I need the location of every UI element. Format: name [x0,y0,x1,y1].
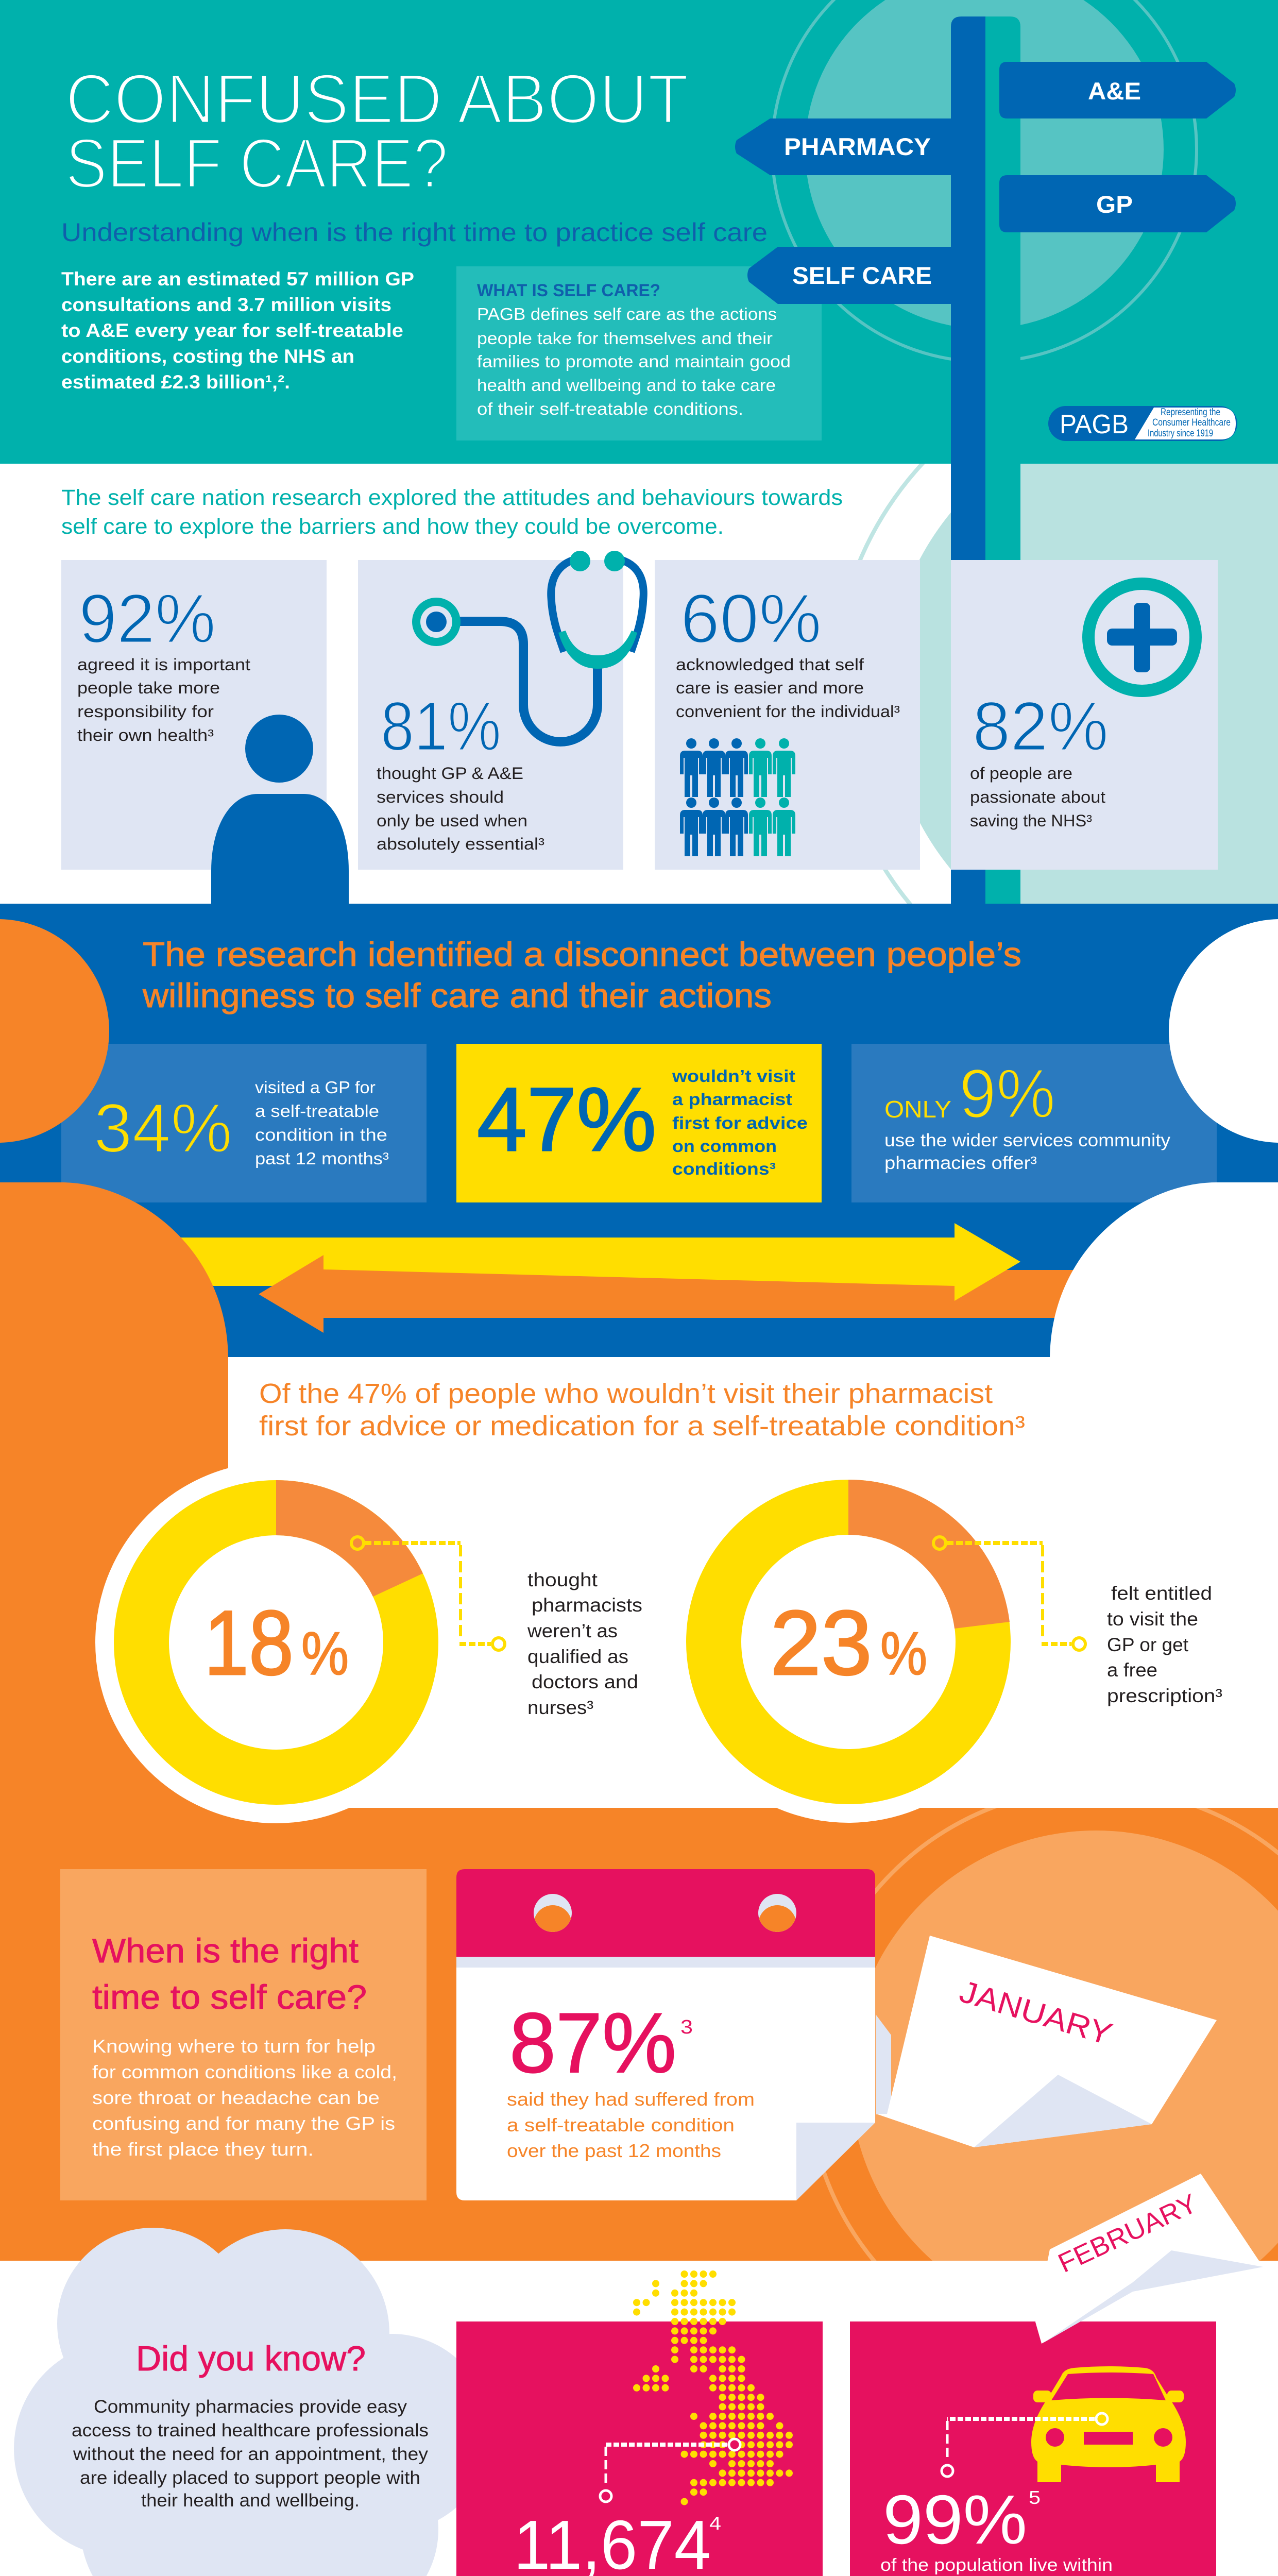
cloud: did you know: are ideally placed to support people with [80,2468,420,2488]
donut chart: 18 percent [95,1462,457,1823]
calendar page: February: FEBRUARY [1054,2189,1202,2279]
intro paragraph: There are an estimated 57 million GP [61,268,414,290]
23 percent caption: prescription³ [1107,1685,1222,1706]
panel: 34 percent [61,1044,427,1202]
panel: 34 percent: 34% [94,1089,232,1167]
panel: when is the right time: for common conditions like a cold, [92,2061,397,2082]
panel: only 9 percent: ONLY [884,1096,951,1123]
PAGB logo: Representing the [1161,407,1220,418]
sign: A&E: A&E [1088,77,1141,105]
panel: only 9 percent [851,1044,1217,1202]
cloud: did you know: access to trained healthcare professionals [72,2420,429,2441]
panel: 60 percent: acknowledged that self [676,655,864,674]
panel: 99 percent: of the population live within [880,2555,1113,2575]
panel: what is self care [456,266,822,440]
signpost pole [951,16,1020,904]
callout: map connector [600,2439,740,2502]
research intro heading: self care to explore the barriers and how they could be overcome. [61,514,724,539]
panel: 34 percent: past 12 months³ [255,1149,389,1168]
panel: 92 percent [61,560,327,870]
PAGB logo: Industry since 1919 [1148,428,1213,439]
panel: when is the right time: time to self care? [92,1978,367,2016]
panel: 11,674 pharmacies: 4 [709,2513,721,2534]
research intro heading [61,485,843,539]
callout: car connector [942,2413,1107,2477]
donut chart: 23 percent: 23 [770,1591,872,1694]
calendar page: January: JANUARY [956,1974,1116,2052]
18 percent caption: nurses³ [527,1697,593,1718]
panel: 99 percent [850,2321,1216,2576]
cloud: did you know: without the need for an appointment, they [73,2444,429,2464]
silhouettes: two people facing each other [0,919,1278,1391]
23 percent caption: a free [1107,1659,1157,1681]
panel: 60 percent: care is easier and more [676,679,864,697]
panel: what is self care: PAGB defines self care as the actions [477,304,777,324]
18 percent caption: thought [527,1569,598,1590]
icon: medical cross [1088,584,1196,691]
panel: when is the right time [60,1869,427,2200]
calendar page: February [1035,2174,1263,2344]
18 percent caption: pharmacists [532,1595,642,1616]
intro paragraph: conditions, costing the NHS an [61,346,354,367]
panel: 82 percent [951,560,1218,870]
title: CONFUSED ABOUT [65,60,689,139]
pharmacist heading [259,1378,1025,1442]
panel: 81 percent: services should [377,788,504,806]
sign: pharmacy [735,118,951,175]
icon: people pictogram [680,738,795,856]
panel: 92 percent: people take more [77,679,220,697]
icon: person [211,715,349,904]
pharmacist heading: Of the 47% of people who wouldn’t visit their pharmacist [259,1378,993,1409]
title [65,60,689,203]
18 percent caption: weren’t as [527,1620,618,1641]
23 percent caption: to visit the [1107,1608,1198,1630]
cloud: did you know: their health and wellbeing. [141,2490,360,2511]
panel: 47 percent: 47% [477,1070,656,1170]
23 percent caption: felt entitled [1111,1583,1212,1604]
cloud: did you know [14,2228,490,2576]
panel: 99 percent: 5 [1029,2487,1041,2508]
panel: 82 percent: saving the NHS³ [970,811,1092,830]
PAGB logo: PAGB [1060,410,1129,439]
sign: pharmacy: PHARMACY [784,133,931,160]
panel: 99 percent: 99% [883,2481,1027,2558]
panel: only 9 percent: 9% [959,1055,1055,1132]
sign: GP [999,175,1236,232]
panel: 47 percent: first for advice [672,1113,808,1132]
panel: 34 percent: a self-treatable [255,1101,379,1121]
panel: 47 percent: a pharmacist [672,1090,792,1109]
panel: 60 percent [655,560,920,870]
calendar page: January [876,1936,1217,2147]
panel: what is self care: of their self-treatable conditions. [477,399,743,418]
section 4 background circle [823,1808,1278,2261]
panel: when is the right time: the first place they turn. [92,2139,314,2160]
panel: 82 percent: 82% [973,687,1109,765]
panel: when is the right time: Knowing where to turn for help [92,2036,376,2057]
23 percent caption [1107,1583,1222,1706]
donut chart: 18 percent: % [301,1620,349,1688]
panel: 92 percent: their own health³ [77,726,214,744]
panel: 47 percent: wouldn’t visit [672,1066,795,1086]
research background circle [858,464,1278,904]
sign: A&E [999,62,1236,118]
intro paragraph: estimated £2.3 billion¹,². [61,371,290,393]
disconnect heading: The research identified a disconnect between people’s [143,935,1021,973]
panel: 82 percent: passionate about [970,788,1105,806]
23 percent caption: GP or get [1107,1634,1189,1655]
panel: 47 percent: conditions³ [672,1159,776,1178]
header background circle [772,0,1197,362]
panel: 47 percent [456,1044,822,1202]
panel: 60 percent: convenient for the individual³ [676,702,900,721]
PAGB logo [1048,406,1237,441]
calendar: 3 [680,2016,693,2038]
panel: when is the right time: confusing and for many the GP is [92,2113,395,2134]
panel: only 9 percent: pharmacies offer³ [884,1153,1037,1173]
cloud: did you know: Did you know? [136,2339,366,2378]
sign: self care [747,247,951,304]
panel: what is self care: people take for themselves and their [477,329,773,348]
panel: 34 percent: condition in the [255,1125,387,1144]
arrows: actions versus intentions [180,1223,1088,1333]
panel: 81 percent: absolutely essential³ [377,835,544,853]
callout: 18 percent connector [351,1537,505,1650]
calendar: over the past 12 months [507,2140,721,2161]
subtitle: Understanding when is the right time to practice self care [61,218,768,247]
disconnect heading [142,935,1021,1014]
panel: when is the right time: sore throat or headache can be [92,2087,380,2108]
sign: GP: GP [1096,191,1133,218]
donut chart: 18 percent: 18 [204,1591,294,1694]
panel: 81 percent [358,560,623,870]
disconnect heading: willingness to self care and their actions [142,976,772,1014]
donut chart: 23 percent [668,1461,1029,1823]
18 percent caption: qualified as [527,1646,628,1667]
panel: 60 percent: 60% [680,580,822,657]
18 percent caption: doctors and [532,1671,638,1692]
title: SELF CARE? [65,124,448,203]
panel: 34 percent: visited a GP for [255,1078,376,1097]
panel: what is self care: health and wellbeing and to take care [477,376,776,395]
panel: 92 percent: 92% [79,580,216,657]
calendar [456,1869,875,2200]
panel: 81 percent: only be used when [377,811,527,830]
pharmacist heading: first for advice or medication for a self-treatable condition³ [259,1411,1025,1442]
donut chart: 23 percent: % [880,1620,927,1688]
panel: what is self care: WHAT IS SELF CARE? [477,281,660,300]
panel: 47 percent: on common [672,1137,777,1156]
panel: 92 percent: responsibility for [77,702,214,721]
18 percent caption [527,1569,642,1718]
cloud: did you know: Community pharmacies provide easy [94,2397,407,2417]
icon: stethoscope [412,551,643,742]
calendar: said they had suffered from [507,2089,755,2110]
intro paragraph: consultations and 3.7 million visits [61,294,391,315]
calendar: 87% [509,1995,676,2090]
panel: 81 percent: 81% [381,687,501,765]
calendar: a self-treatable condition [507,2114,735,2136]
dot map of the UK [637,2274,789,2502]
intro paragraph: to A&E every year for self-treatable [61,320,403,341]
callout: 23 percent connector [933,1537,1085,1650]
panel: only 9 percent: use the wider services community [884,1130,1171,1150]
research intro heading: The self care nation research explored the attitudes and behaviours towards [61,485,843,510]
panel: when is the right time: When is the right [92,1931,359,1970]
panel: 82 percent: of people are [970,764,1072,783]
intro paragraph [61,268,414,393]
icon: car [1031,2366,1186,2482]
panel: 81 percent: thought GP & A&E [377,764,523,783]
sign: self care: SELF CARE [792,262,932,289]
panel: what is self care: families to promote and maintain good [477,352,791,371]
panel: 92 percent: agreed it is important [77,655,250,674]
panel: 11,674 pharmacies [456,2321,823,2576]
PAGB logo: Consumer Healthcare [1152,417,1231,428]
